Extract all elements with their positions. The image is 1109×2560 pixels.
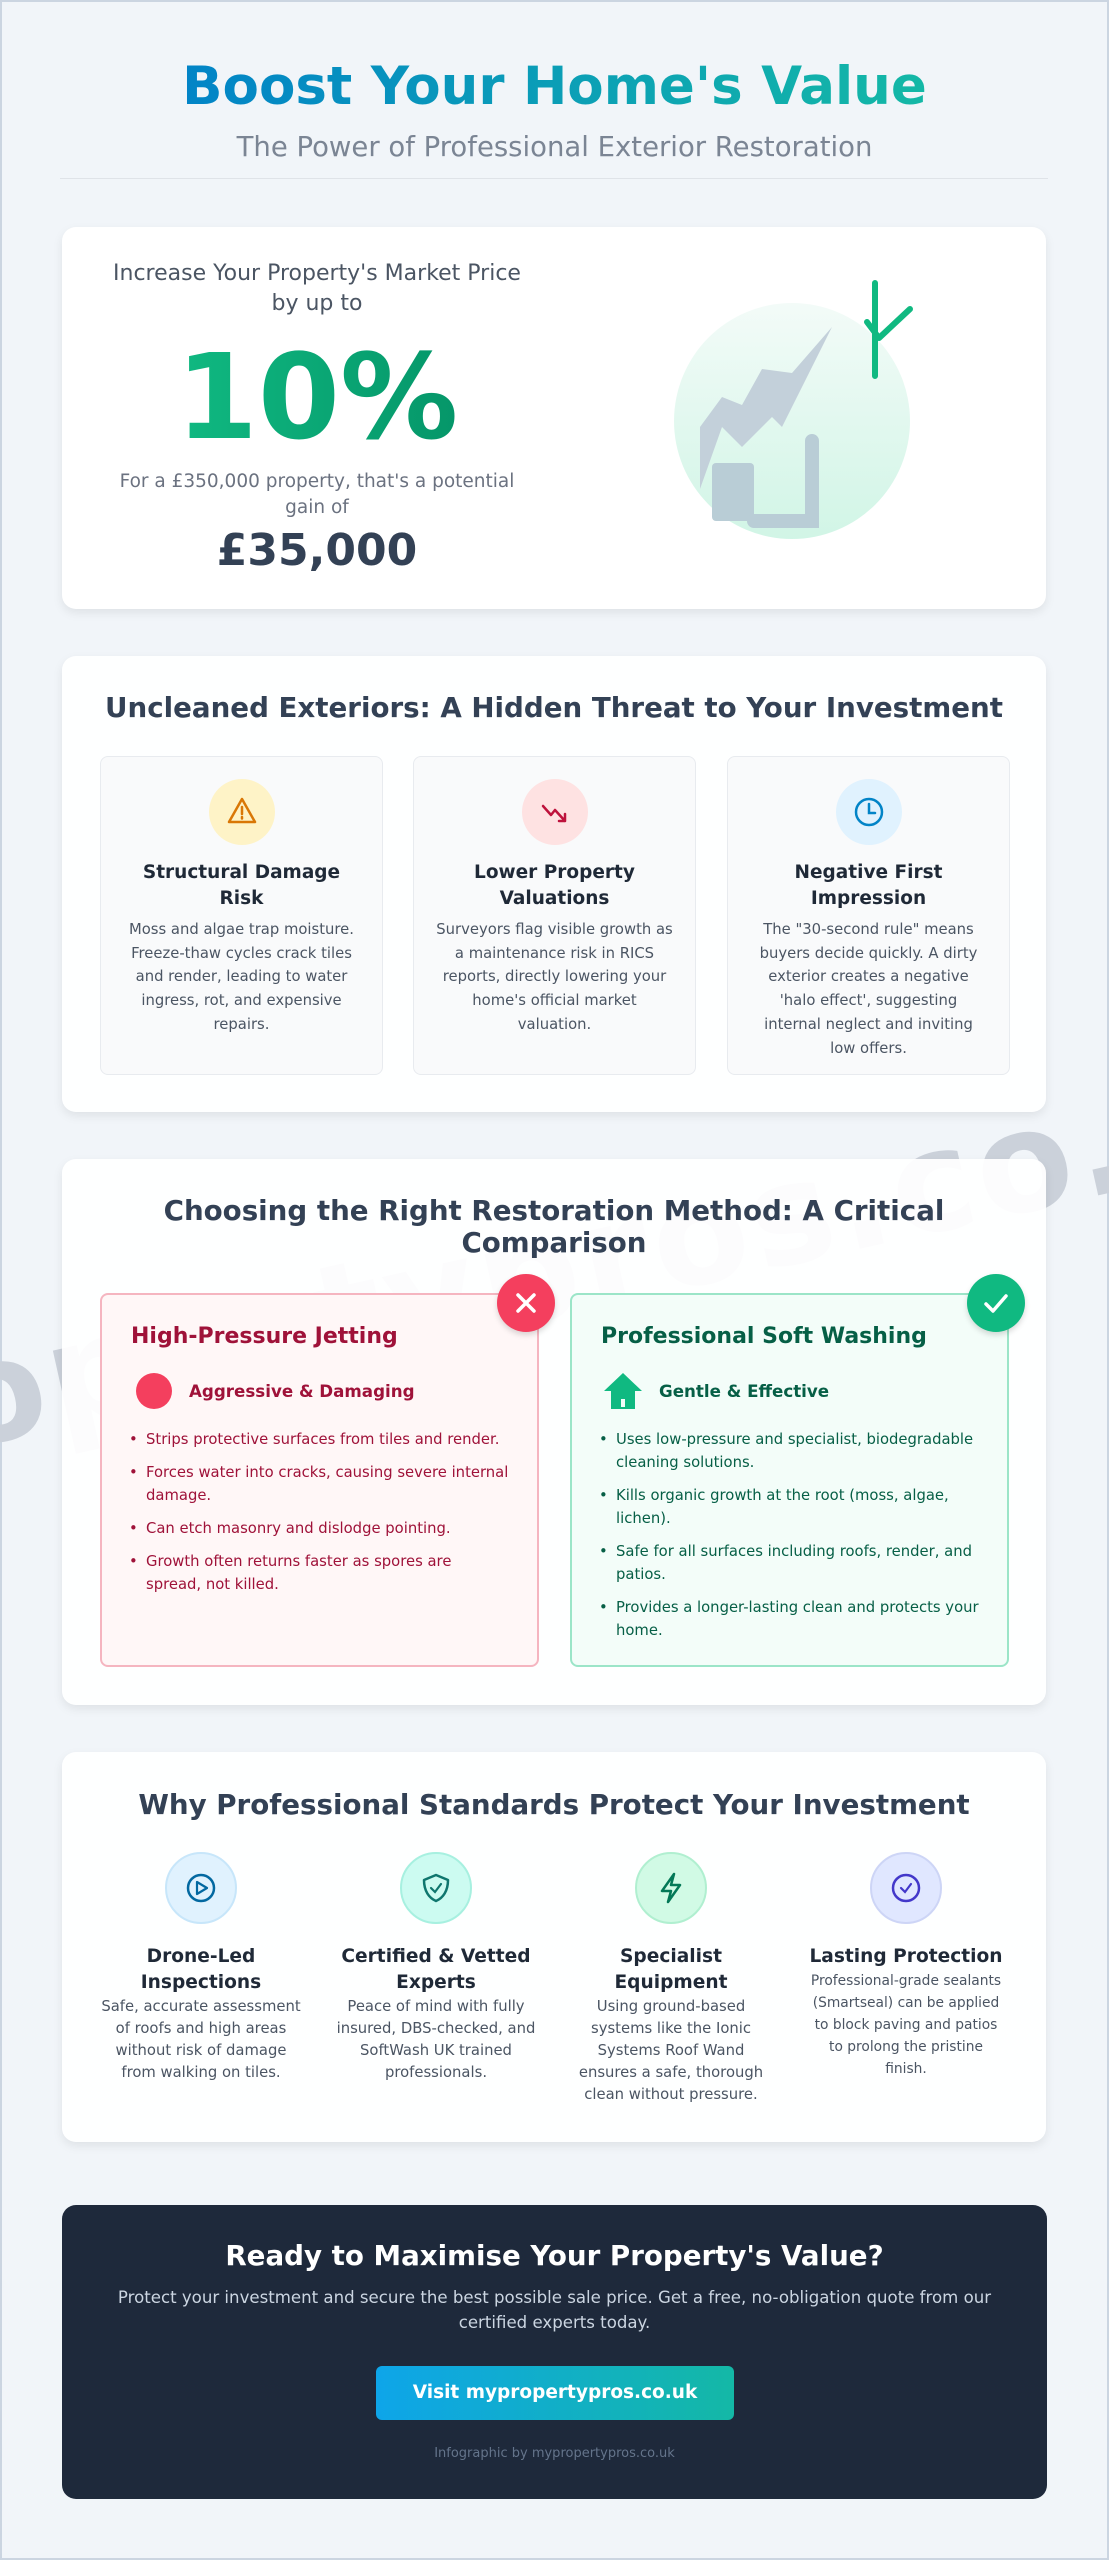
value: £35,000 <box>217 525 417 576</box>
box: high pressure: Can etch masonry and dislodge pointing. <box>146 1520 451 1537</box>
footer: Infographic by mypropertypros.co.uk <box>434 2446 675 2461</box>
text: gain: For a £350,000 property, that's a potential <box>120 471 514 492</box>
column: equipment: Specialist Equipment <box>614 1946 728 1993</box>
icon: clock <box>836 779 902 845</box>
sub card: structural: Moss and algae trap moisture. Freeze-thaw cycles crack tiles and render, leading to water ingress, rot, and expensive repairs. <box>129 921 354 1033</box>
button <box>376 2366 734 2420</box>
panel: market price <box>62 227 1046 609</box>
icon: trend down <box>522 779 588 845</box>
title: Boost Your Home's Value <box>182 56 927 117</box>
text: increase: Increase Your Property's Market Price <box>113 261 521 286</box>
big number: 10% <box>176 328 458 466</box>
box: high pressure: Aggressive & Damaging <box>189 1381 415 1401</box>
cta text: certified experts today. <box>459 2313 650 2332</box>
cta text <box>118 2288 992 2332</box>
box: high pressure: Forces water into cracks, causing severe internal damage. <box>146 1464 508 1504</box>
box: soft washing: Safe for all surfaces including roofs, render, and patios. <box>616 1543 972 1583</box>
sub card: structural: Structural Damage Risk <box>143 862 340 909</box>
box: soft washing: Uses low-pressure and specialist, biodegradable cleaning solutions. <box>616 1431 973 1471</box>
sub card: first impression: The "30-second rule" means buyers decide quickly. A dirty exterior creates a negative 'halo effect', suggesting internal neglect and inviting low offers. <box>760 921 977 1057</box>
icon: red dot <box>136 1373 172 1409</box>
column: protection <box>809 1852 1003 2077</box>
cta heading: Ready to Maximise Your Property's Value? <box>225 2239 884 2272</box>
sub card: valuations <box>413 756 696 1075</box>
column: equipment: Using ground-based systems like the Ionic Systems Roof Wand ensures a safe, thorough clean without pressure. <box>579 1998 763 2103</box>
sub card: valuations: Lower Property Valuations <box>474 862 635 909</box>
text: gain <box>120 471 514 518</box>
box: high pressure: Growth often returns faster as spores are <box>146 1553 451 1570</box>
heading: Why Professional Standards Protect Your Investment <box>138 1788 970 1821</box>
text: gain: gain of <box>285 497 349 518</box>
column: drone: Drone-Led Inspections <box>141 1946 261 1993</box>
sub card: first impression <box>727 756 1010 1075</box>
panel: comparison <box>62 1159 1046 1705</box>
column: equipment <box>579 1852 763 2103</box>
sub card: first impression: Negative First Impression <box>795 862 942 909</box>
box: soft washing: Gentle & Effective <box>659 1381 829 1401</box>
sub card: valuations: Surveyors flag visible growth as a maintenance risk in RICS reports, directly lowering your home's official market valuation. <box>436 921 673 1033</box>
column: protection: Professional-grade sealants (Smartseal) can be applied to block paving and patios to prolong the pristine finish. <box>811 1973 1001 2077</box>
column: certified: Peace of mind with fully insured, DBS-checked, and SoftWash UK trained professionals. <box>337 1998 535 2081</box>
button: Visit mypropertypros.co.uk <box>413 2382 697 2403</box>
box: high pressure: Strips protective surfaces from tiles and render. <box>146 1431 499 1448</box>
box: high pressure: spread, not killed. <box>146 1576 279 1593</box>
text: increase <box>113 261 521 316</box>
subtitle: The Power of Professional Exterior Restoration <box>237 131 872 163</box>
panel: threats <box>62 656 1046 1112</box>
panel: professional standards <box>62 1752 1046 2142</box>
column: drone <box>101 1852 301 2081</box>
panel: call to action <box>62 2205 1047 2499</box>
box: soft washing: Professional Soft Washing <box>601 1324 927 1349</box>
box: high pressure: High-Pressure Jetting <box>131 1324 398 1349</box>
box: soft washing: Provides a longer-lasting clean and protects your home. <box>616 1599 979 1639</box>
icon: house <box>604 1373 642 1409</box>
box: soft washing <box>570 1293 1009 1667</box>
column: certified: Certified & Vetted Experts <box>341 1946 531 1993</box>
box: high pressure <box>100 1293 539 1667</box>
heading: Uncleaned Exteriors: A Hidden Threat to Your Investment <box>105 691 1003 724</box>
column: drone: Safe, accurate assessment of roofs and high areas without risk of damage from walking on tiles. <box>101 1998 301 2081</box>
badge: check <box>967 1274 1025 1332</box>
cta text: Protect your investment and secure the best possible sale price. Get a free, no-obligation quote from our <box>118 2288 991 2307</box>
text: increase: by up to <box>272 291 362 316</box>
heading: Choosing the Right Restoration Method: A Critical Comparison <box>164 1194 944 1259</box>
box: soft washing: Kills organic growth at the root (moss, algae, lichen). <box>616 1487 949 1527</box>
icon: warning <box>209 779 275 845</box>
column: certified <box>337 1852 535 2081</box>
badge: cross <box>497 1274 555 1332</box>
icon: house with check <box>674 280 913 539</box>
sub card: structural <box>100 756 383 1075</box>
column: protection: Lasting Protection <box>809 1946 1003 1967</box>
